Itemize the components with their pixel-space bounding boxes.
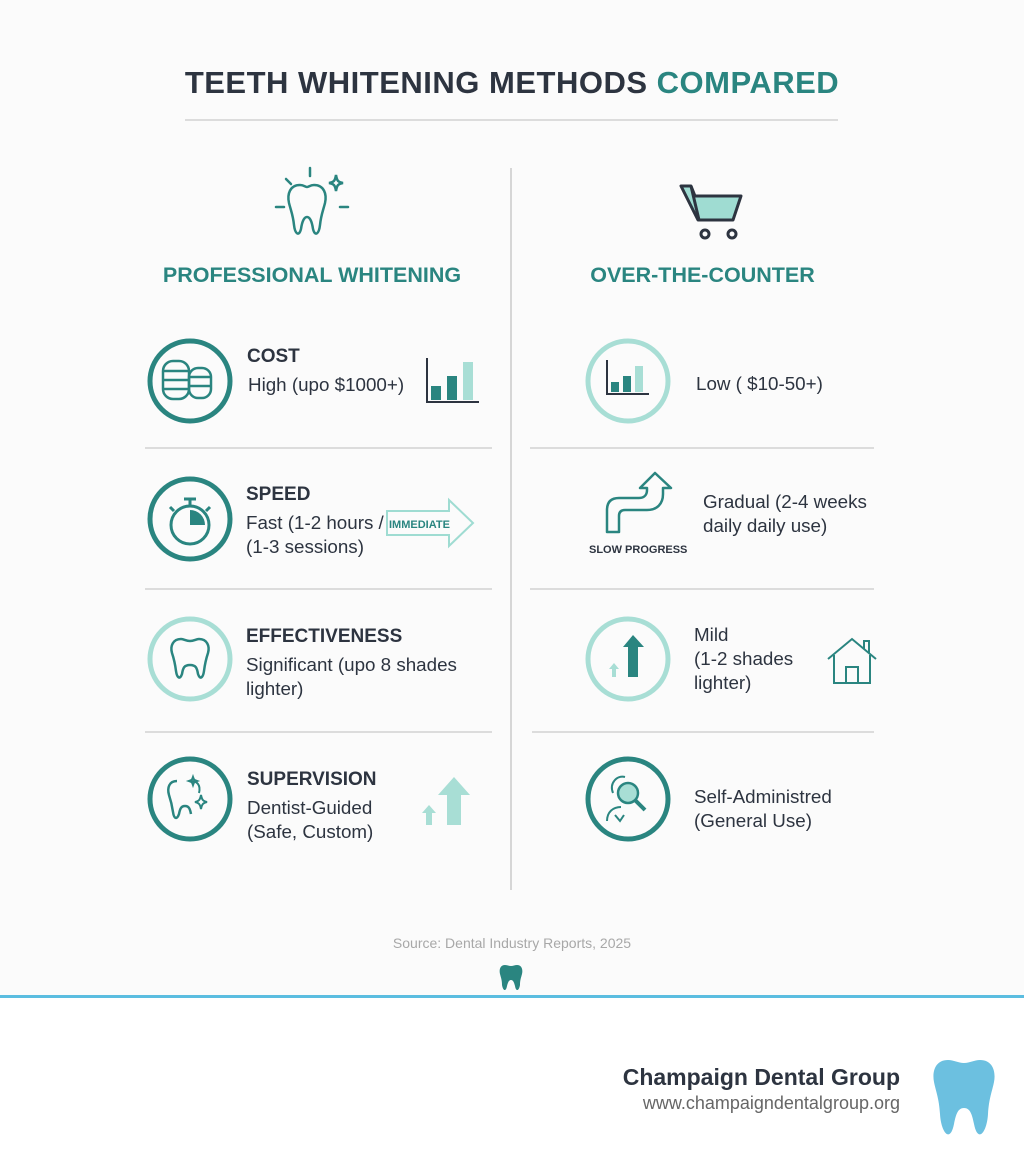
row: supervision otc: Self-Administred bbox=[694, 786, 832, 807]
icon: small tooth bbox=[500, 965, 522, 990]
icon: blue tooth logo bbox=[933, 1060, 995, 1134]
row: effectiveness otc: (1-2 shades bbox=[694, 648, 793, 669]
row: speed otc: daily daily use) bbox=[703, 515, 827, 536]
row: supervision professional bbox=[148, 756, 470, 842]
row: cost professional: High (upo $1000+) bbox=[248, 374, 404, 395]
row: cost professional bbox=[148, 338, 479, 424]
icon: cart bbox=[679, 184, 742, 240]
row: speed otc: Gradual (2-4 weeks bbox=[703, 491, 867, 512]
row: effectiveness professional bbox=[148, 616, 457, 702]
icon: bar chart bbox=[426, 358, 479, 403]
row: effectiveness otc: lighter) bbox=[694, 672, 751, 693]
icon: sparkling tooth bbox=[274, 166, 350, 235]
row: effectiveness professional: EFFECTIVENESS bbox=[246, 626, 402, 647]
row: speed professional: SPEED bbox=[246, 484, 310, 505]
row: cost professional: COST bbox=[247, 346, 300, 367]
footer brand: Champaign Dental Group bbox=[623, 1064, 900, 1090]
footer brand bbox=[623, 1064, 900, 1113]
arrow: immediate: IMMEDIATE bbox=[389, 519, 450, 531]
row: speed professional: (1-3 sessions) bbox=[246, 536, 364, 557]
row: speed professional: Fast (1-2 hours / bbox=[246, 512, 384, 533]
title: TEETH WHITENING METHODS COMPARED bbox=[185, 65, 839, 100]
row: supervision professional: SUPERVISION bbox=[247, 769, 377, 790]
footer brand: www.champaigndentalgroup.org bbox=[643, 1093, 900, 1113]
row: effectiveness professional: Significant (upo 8 shades bbox=[246, 654, 457, 675]
row: supervision professional: Dentist-Guided bbox=[247, 797, 372, 818]
arrow: immediate bbox=[386, 498, 474, 548]
icon: house bbox=[827, 638, 877, 684]
row: supervision otc: (General Use) bbox=[694, 810, 812, 831]
footer band bbox=[0, 995, 1024, 1157]
row: effectiveness otc: Mild bbox=[694, 624, 728, 645]
row: speed professional bbox=[148, 476, 474, 562]
row: supervision otc bbox=[586, 756, 832, 842]
row: effectiveness professional: lighter) bbox=[246, 678, 303, 699]
row: speed otc: SLOW PROGRESS bbox=[589, 544, 687, 556]
icon: coins bbox=[148, 338, 232, 424]
icon: arrows up bbox=[422, 777, 470, 825]
row: supervision professional: (Safe, Custom) bbox=[247, 821, 373, 842]
row: cost otc: Low ( $10-50+) bbox=[696, 373, 823, 394]
row: effectiveness otc bbox=[586, 616, 877, 702]
heading: otc: OVER-THE-COUNTER bbox=[590, 263, 815, 287]
heading: professional: PROFESSIONAL WHITENING bbox=[163, 263, 461, 287]
row: speed otc bbox=[589, 472, 867, 556]
source note: Source: Dental Industry Reports, 2025 bbox=[393, 935, 631, 951]
row: cost otc bbox=[586, 338, 823, 424]
